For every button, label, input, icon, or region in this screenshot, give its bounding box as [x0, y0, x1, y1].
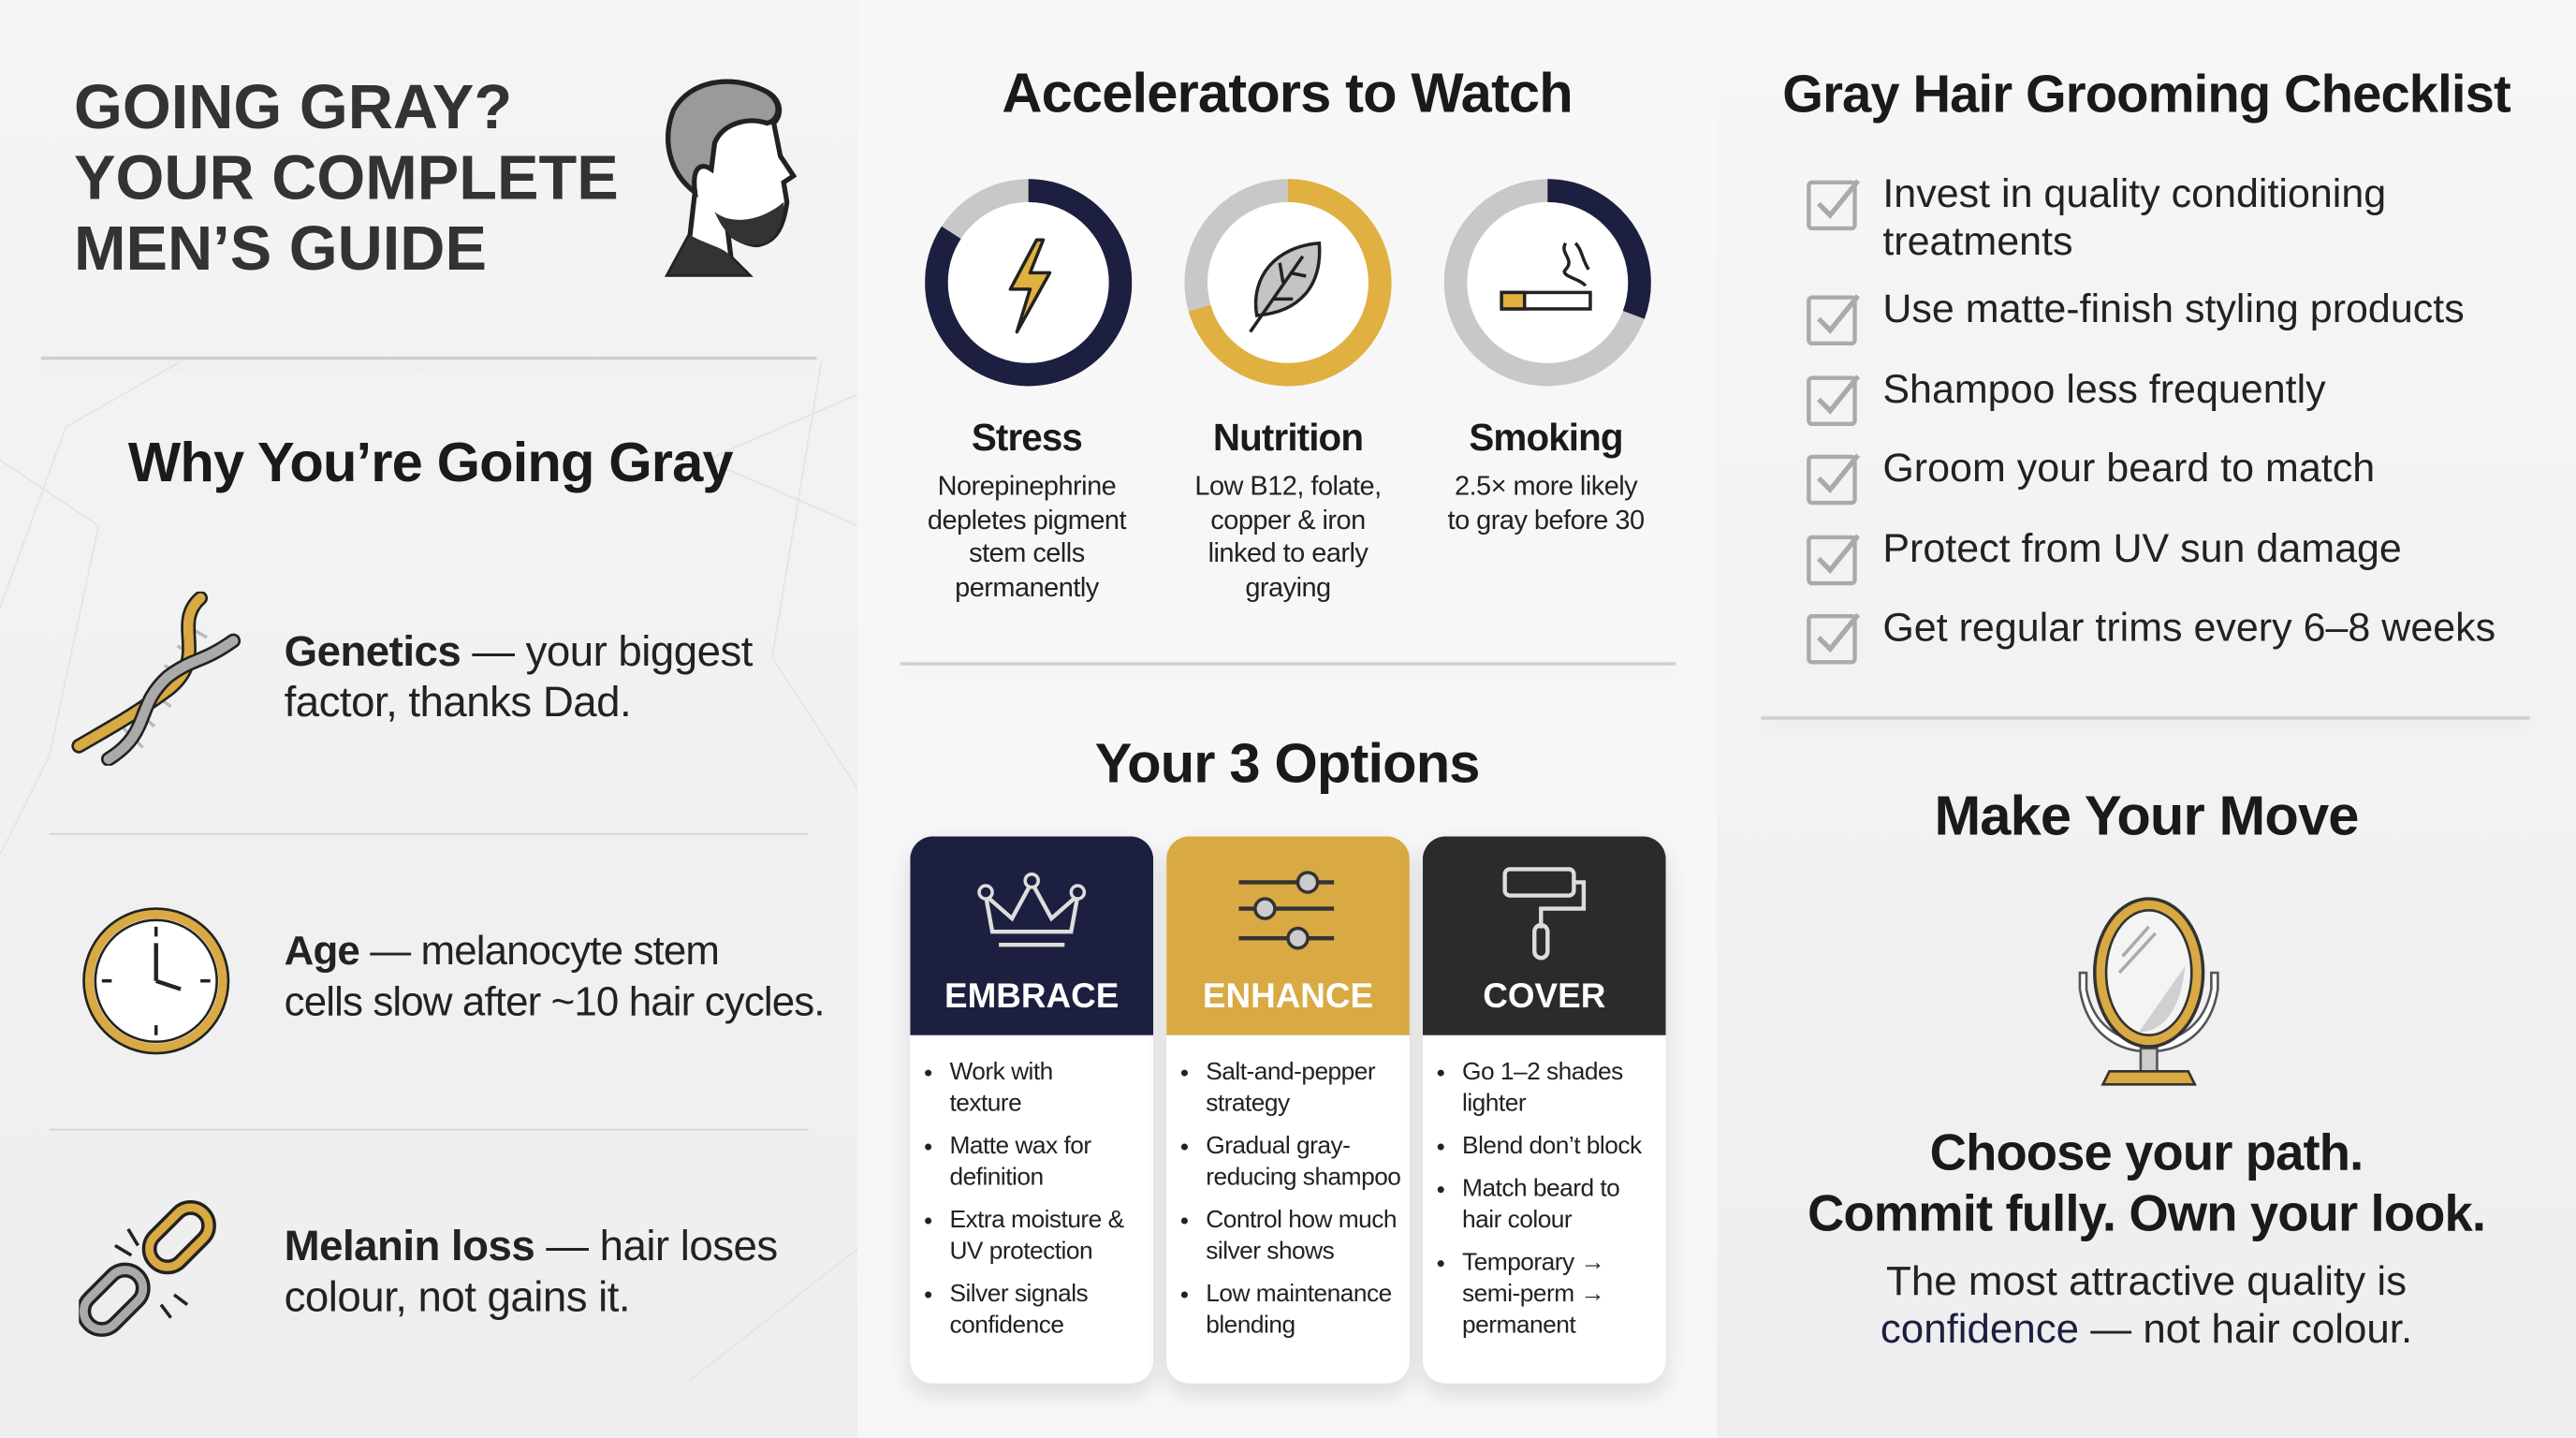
card: embrace: texture	[949, 1090, 1021, 1117]
label: nutrition: graying	[1245, 573, 1331, 602]
text: age	[285, 929, 825, 1025]
card: cover: permanent	[1462, 1312, 1575, 1339]
title: GOING GRAY?	[74, 74, 512, 143]
icon: paint roller	[1503, 867, 1586, 961]
text: melanin: Melanin loss — hair loses	[285, 1221, 778, 1270]
icon: DNA	[71, 592, 242, 766]
label: stress: Stress	[972, 416, 1082, 459]
card: enhance: Low maintenance	[1206, 1280, 1392, 1308]
card: cover: COVER	[1483, 977, 1605, 1016]
card: enhance: strategy	[1206, 1090, 1290, 1117]
icon: sliders	[1238, 871, 1335, 949]
card: cover: hair colour	[1462, 1206, 1572, 1234]
label: nutrition	[1194, 416, 1382, 602]
heading: make your move: Make Your Move	[1934, 785, 2359, 848]
label: stress: depletes pigment	[928, 506, 1126, 535]
icon: bearded head	[665, 79, 798, 277]
heading: why: Why You’re Going Gray	[128, 433, 733, 494]
heading: accelerators: Accelerators to Watch	[1002, 63, 1573, 125]
card: cover: Go 1–2 shades	[1462, 1058, 1623, 1086]
label: nutrition: Low B12, folate,	[1194, 472, 1382, 501]
checklist items: Use matte-finish styling products	[1882, 287, 2465, 332]
donut: stress	[925, 179, 1133, 386]
checklist items: Get regular trims every 6–8 weeks	[1882, 607, 2496, 651]
label: stress	[928, 416, 1127, 602]
card: cover: semi-perm →	[1462, 1280, 1604, 1308]
text: call to action: Commit fully. Own your look.	[1808, 1184, 2485, 1242]
text: genetics	[285, 626, 753, 726]
heading: options: Your 3 Options	[1095, 733, 1480, 795]
card: enhance: Salt-and-pepper	[1206, 1058, 1375, 1086]
text: genetics: Genetics — your biggest	[285, 626, 753, 675]
label: smoking: to gray before 30	[1448, 506, 1645, 535]
card: enhance: ENHANCE	[1203, 977, 1373, 1016]
text: genetics: factor, thanks Dad.	[285, 677, 631, 726]
checklist items	[1807, 172, 2496, 665]
heading: checklist: Gray Hair Grooming Checklist	[1782, 64, 2510, 124]
card: enhance: Gradual gray-	[1206, 1132, 1350, 1160]
text: call to action: The most attractive quality is	[1886, 1258, 2407, 1305]
card: embrace: confidence	[949, 1312, 1064, 1339]
card: enhance: Control how much	[1206, 1206, 1397, 1234]
text: call to action: Choose your path.	[1930, 1123, 2363, 1181]
text: call to action: confidence — not hair colour.	[1881, 1306, 2412, 1352]
card: enhance: reducing shampoo	[1206, 1164, 1400, 1191]
title: MEN’S GUIDE	[74, 215, 487, 285]
icon: broken chain	[79, 1200, 216, 1337]
title	[74, 74, 619, 285]
title: YOUR COMPLETE	[74, 144, 619, 213]
label: stress: stem cells	[969, 539, 1085, 568]
divider	[41, 357, 816, 360]
icon: crown	[977, 873, 1086, 947]
card: enhance: blending	[1206, 1312, 1295, 1339]
card: embrace	[910, 836, 1153, 1384]
label: smoking: Smoking	[1469, 416, 1623, 459]
card: enhance	[1166, 836, 1410, 1384]
text: age: Age — melanocyte stem	[285, 929, 719, 975]
icon: clock	[82, 907, 230, 1054]
card: embrace: Extra moisture &	[949, 1206, 1124, 1234]
card: cover	[1423, 836, 1666, 1384]
text: call to action	[1808, 1123, 2485, 1352]
checklist items: treatments	[1882, 220, 2072, 265]
card: cover: Match beard to	[1462, 1175, 1619, 1203]
card: embrace: Matte wax for	[949, 1132, 1091, 1160]
label: smoking	[1447, 416, 1645, 535]
label: nutrition: copper & iron	[1210, 506, 1366, 535]
donut: nutrition	[1185, 179, 1391, 386]
card: cover: Blend don’t block	[1462, 1132, 1642, 1160]
label: stress: permanently	[955, 573, 1099, 602]
card: enhance: silver shows	[1206, 1238, 1334, 1265]
card: embrace: Silver signals	[949, 1280, 1088, 1308]
checklist items: Groom your beard to match	[1882, 447, 2375, 492]
checklist items: Protect from UV sun damage	[1882, 527, 2402, 572]
text: age: cells slow after ~10 hair cycles.	[285, 979, 825, 1025]
donut: smoking	[1443, 179, 1651, 386]
text: melanin	[285, 1221, 778, 1321]
checklist items: Shampoo less frequently	[1882, 368, 2326, 413]
card: cover: lighter	[1462, 1090, 1526, 1117]
card: embrace: UV protection	[949, 1238, 1092, 1265]
card: embrace: EMBRACE	[944, 977, 1119, 1016]
card: embrace: Work with	[949, 1058, 1053, 1086]
label: nutrition: linked to early	[1208, 539, 1368, 568]
card: cover: Temporary →	[1462, 1249, 1604, 1277]
label: stress: Norepinephrine	[938, 472, 1116, 501]
label: smoking: 2.5× more likely	[1455, 472, 1637, 501]
text: melanin: colour, not gains it.	[285, 1271, 630, 1321]
card: embrace: definition	[949, 1164, 1044, 1191]
checklist items: Invest in quality conditioning	[1882, 172, 2386, 217]
icon: mirror	[2078, 897, 2219, 1086]
label: nutrition: Nutrition	[1213, 416, 1363, 459]
